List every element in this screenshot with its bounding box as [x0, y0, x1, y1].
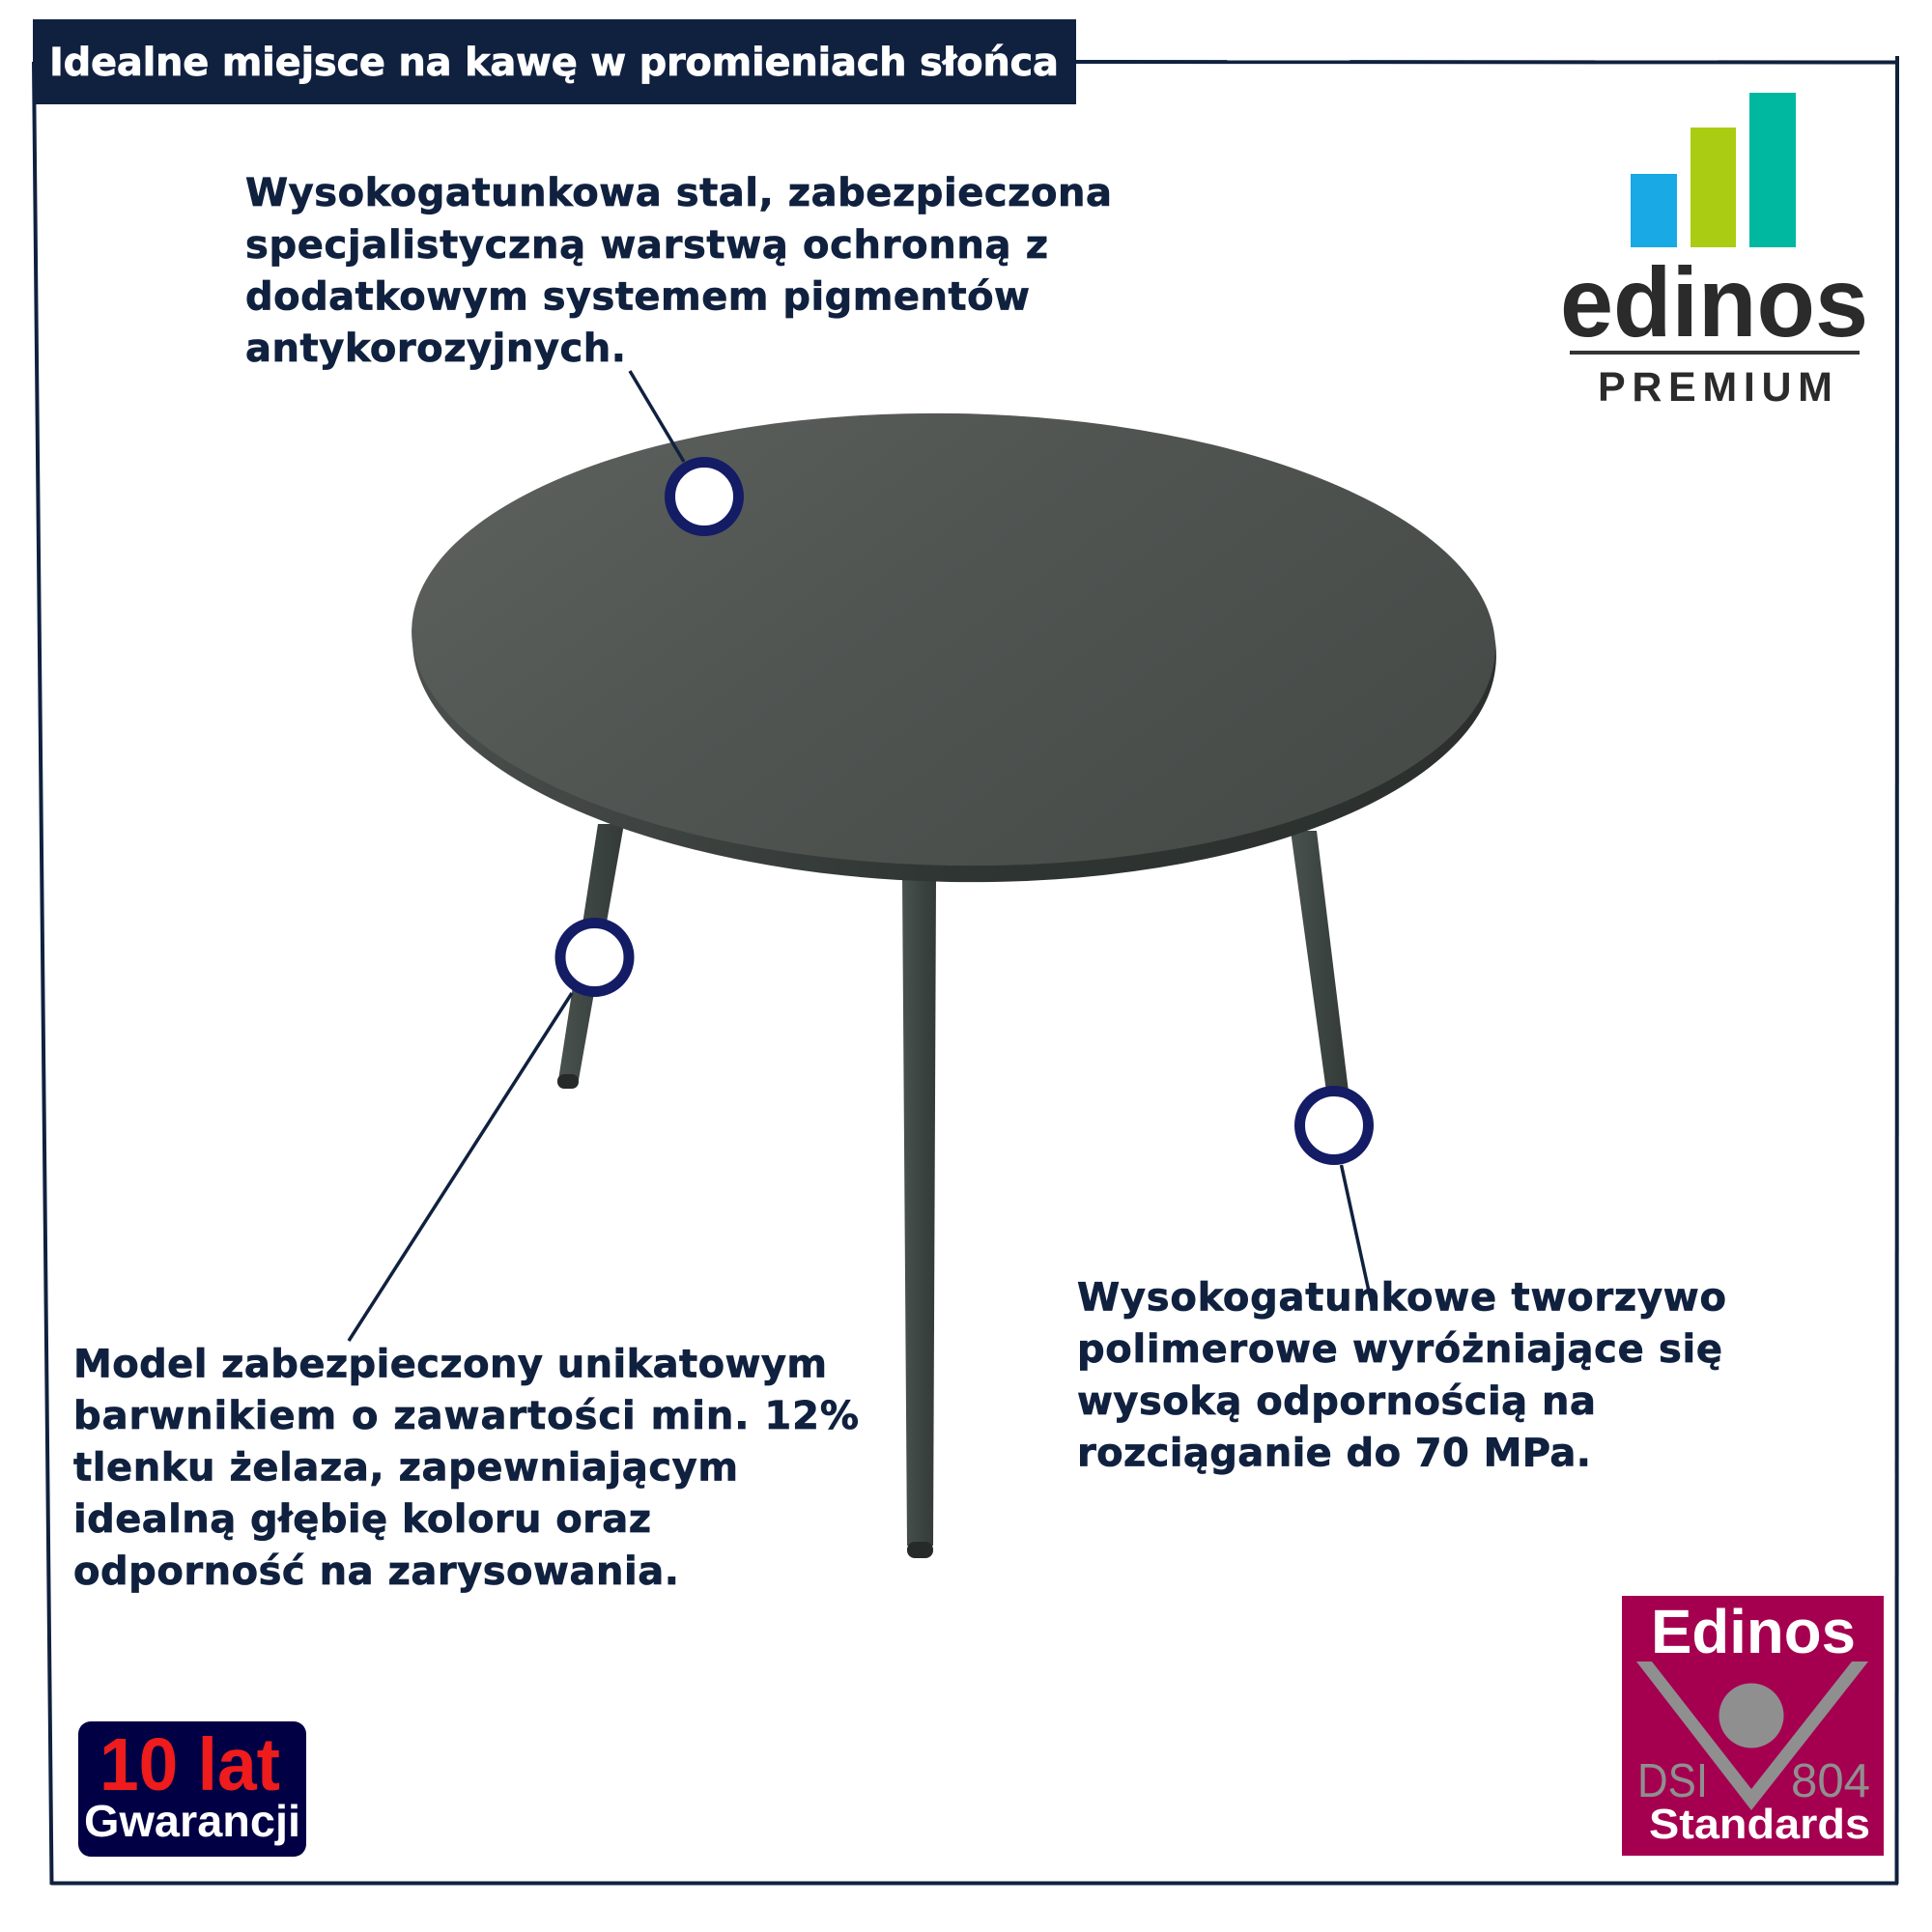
- title banner: [33, 19, 1076, 104]
- badge: Edinos DSI 804 Standards: DSI: [1637, 1755, 1708, 1807]
- callout marker: left leg: [560, 923, 629, 991]
- text block: colour pigment: tlenku żelaza, zapewniającym: [73, 1445, 738, 1490]
- text block: steel top: Wysokogatunkowa stal, zabezpieczona: [245, 171, 1112, 215]
- leader lines: [349, 371, 1373, 1341]
- callout marker: right leg: [1300, 1092, 1368, 1159]
- table leg: left: [557, 824, 624, 1089]
- text block: polymer: polimerowe wyróżniające się: [1077, 1327, 1722, 1372]
- table leg: right: [1291, 831, 1349, 1092]
- text block: polymer: Wysokogatunkowe tworzywo: [1077, 1275, 1726, 1320]
- text block: colour pigment: idealną głębię koloru oraz: [73, 1497, 651, 1542]
- badge: 10 years warranty: Gwarancji: [84, 1796, 300, 1846]
- badge: Edinos DSI 804 Standards: Standards: [1649, 1801, 1870, 1848]
- text block: steel top: dodatkowym systemem pigmentów: [245, 274, 1030, 319]
- text block: polymer: wysoką odpornością na: [1077, 1379, 1596, 1424]
- text block: steel top: antykorozyjnych.: [245, 327, 626, 371]
- text block: polymer: rozciąganie do 70 MPa.: [1077, 1432, 1591, 1476]
- table illustration: [408, 404, 1500, 1558]
- table top: [408, 404, 1500, 892]
- badge: 10 years warranty: [78, 1721, 306, 1857]
- logo subtitle: PREMIUM: [1598, 364, 1833, 411]
- badge: Edinos DSI 804 Standards: Edinos: [1651, 1597, 1856, 1666]
- callout marker: table top: [670, 462, 738, 531]
- badge: Edinos DSI 804 Standards: [1622, 1596, 1884, 1856]
- badge: Edinos DSI 804 Standards: 804: [1791, 1755, 1870, 1807]
- text block: colour pigment: Model zabezpieczony unikatowym: [73, 1343, 827, 1387]
- title banner: Idealne miejsce na kawę w promieniach słońca: [49, 41, 1059, 85]
- text block: colour pigment: odporność na zarysowania.: [73, 1549, 679, 1594]
- badge: 10 years warranty: 10 lat: [99, 1723, 280, 1806]
- logo wordmark: edinos: [1560, 247, 1868, 357]
- text block: colour pigment: barwnikiem o zawartości min. 12%: [73, 1394, 859, 1438]
- logo: edinos premium: [1560, 93, 1868, 411]
- table leg: centre: [902, 877, 936, 1558]
- text block: polymer: [1077, 1275, 1726, 1476]
- text block: colour pigment: [73, 1343, 859, 1594]
- text block: steel top: [245, 171, 1112, 371]
- text block: steel top: specjalistyczną warstwą ochronną z: [245, 223, 1048, 268]
- logo bars: [1631, 93, 1796, 247]
